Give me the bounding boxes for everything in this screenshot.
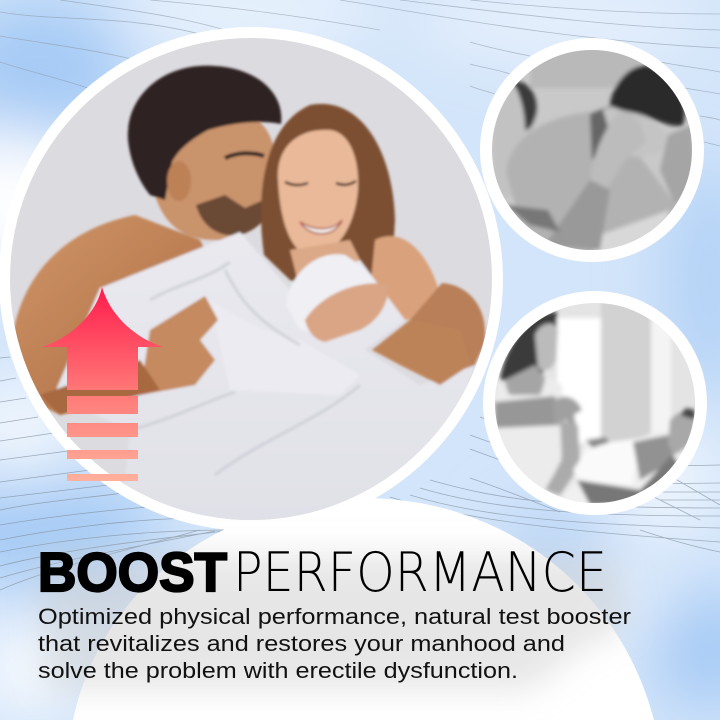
description text: that revitalizes and restores your manhood and (38, 631, 565, 656)
wave mesh right (390, 417, 720, 552)
neck and chest (505, 365, 545, 400)
heading: BOOST (38, 541, 227, 603)
heading: PERFORMANCE (233, 541, 607, 604)
woman's hand (305, 283, 388, 342)
neck (588, 104, 614, 160)
hair (610, 66, 685, 126)
description text: Optimized physical performance, natural test booster (38, 604, 631, 629)
shirt (506, 112, 680, 260)
man's hand right (372, 320, 470, 385)
sheet (54, 230, 476, 484)
wave lines top (0, 0, 720, 146)
woman behind (493, 86, 538, 200)
hair (500, 312, 557, 380)
woman's shoulder and arm (370, 236, 444, 320)
photo circle: man with hand on head (480, 38, 704, 262)
sheet folds (130, 262, 360, 475)
woman's face (278, 130, 358, 256)
other arm (660, 125, 695, 205)
face (535, 324, 558, 370)
man's back (14, 214, 204, 416)
description text: solve the problem with erectile dysfunction. (38, 658, 518, 683)
hand (592, 115, 628, 185)
man's arm right (409, 281, 486, 370)
bed and man (564, 434, 684, 503)
icon: upward arrow (42, 287, 163, 481)
heading (40, 550, 603, 593)
photo circle: woman with thumbs down (483, 291, 707, 520)
description text (38, 604, 631, 683)
face (603, 107, 668, 157)
arm with thumbs down (495, 396, 560, 428)
main photo circle (0, 27, 510, 531)
white arc panel (73, 498, 654, 720)
woman top (497, 378, 563, 490)
forearm (545, 180, 610, 250)
man's hand (140, 296, 218, 395)
wave lines left and bottom (0, 357, 230, 590)
man's head (128, 66, 281, 240)
woman's neck (288, 238, 361, 277)
woman's hair (261, 104, 395, 310)
text shadow haze (40, 555, 630, 690)
